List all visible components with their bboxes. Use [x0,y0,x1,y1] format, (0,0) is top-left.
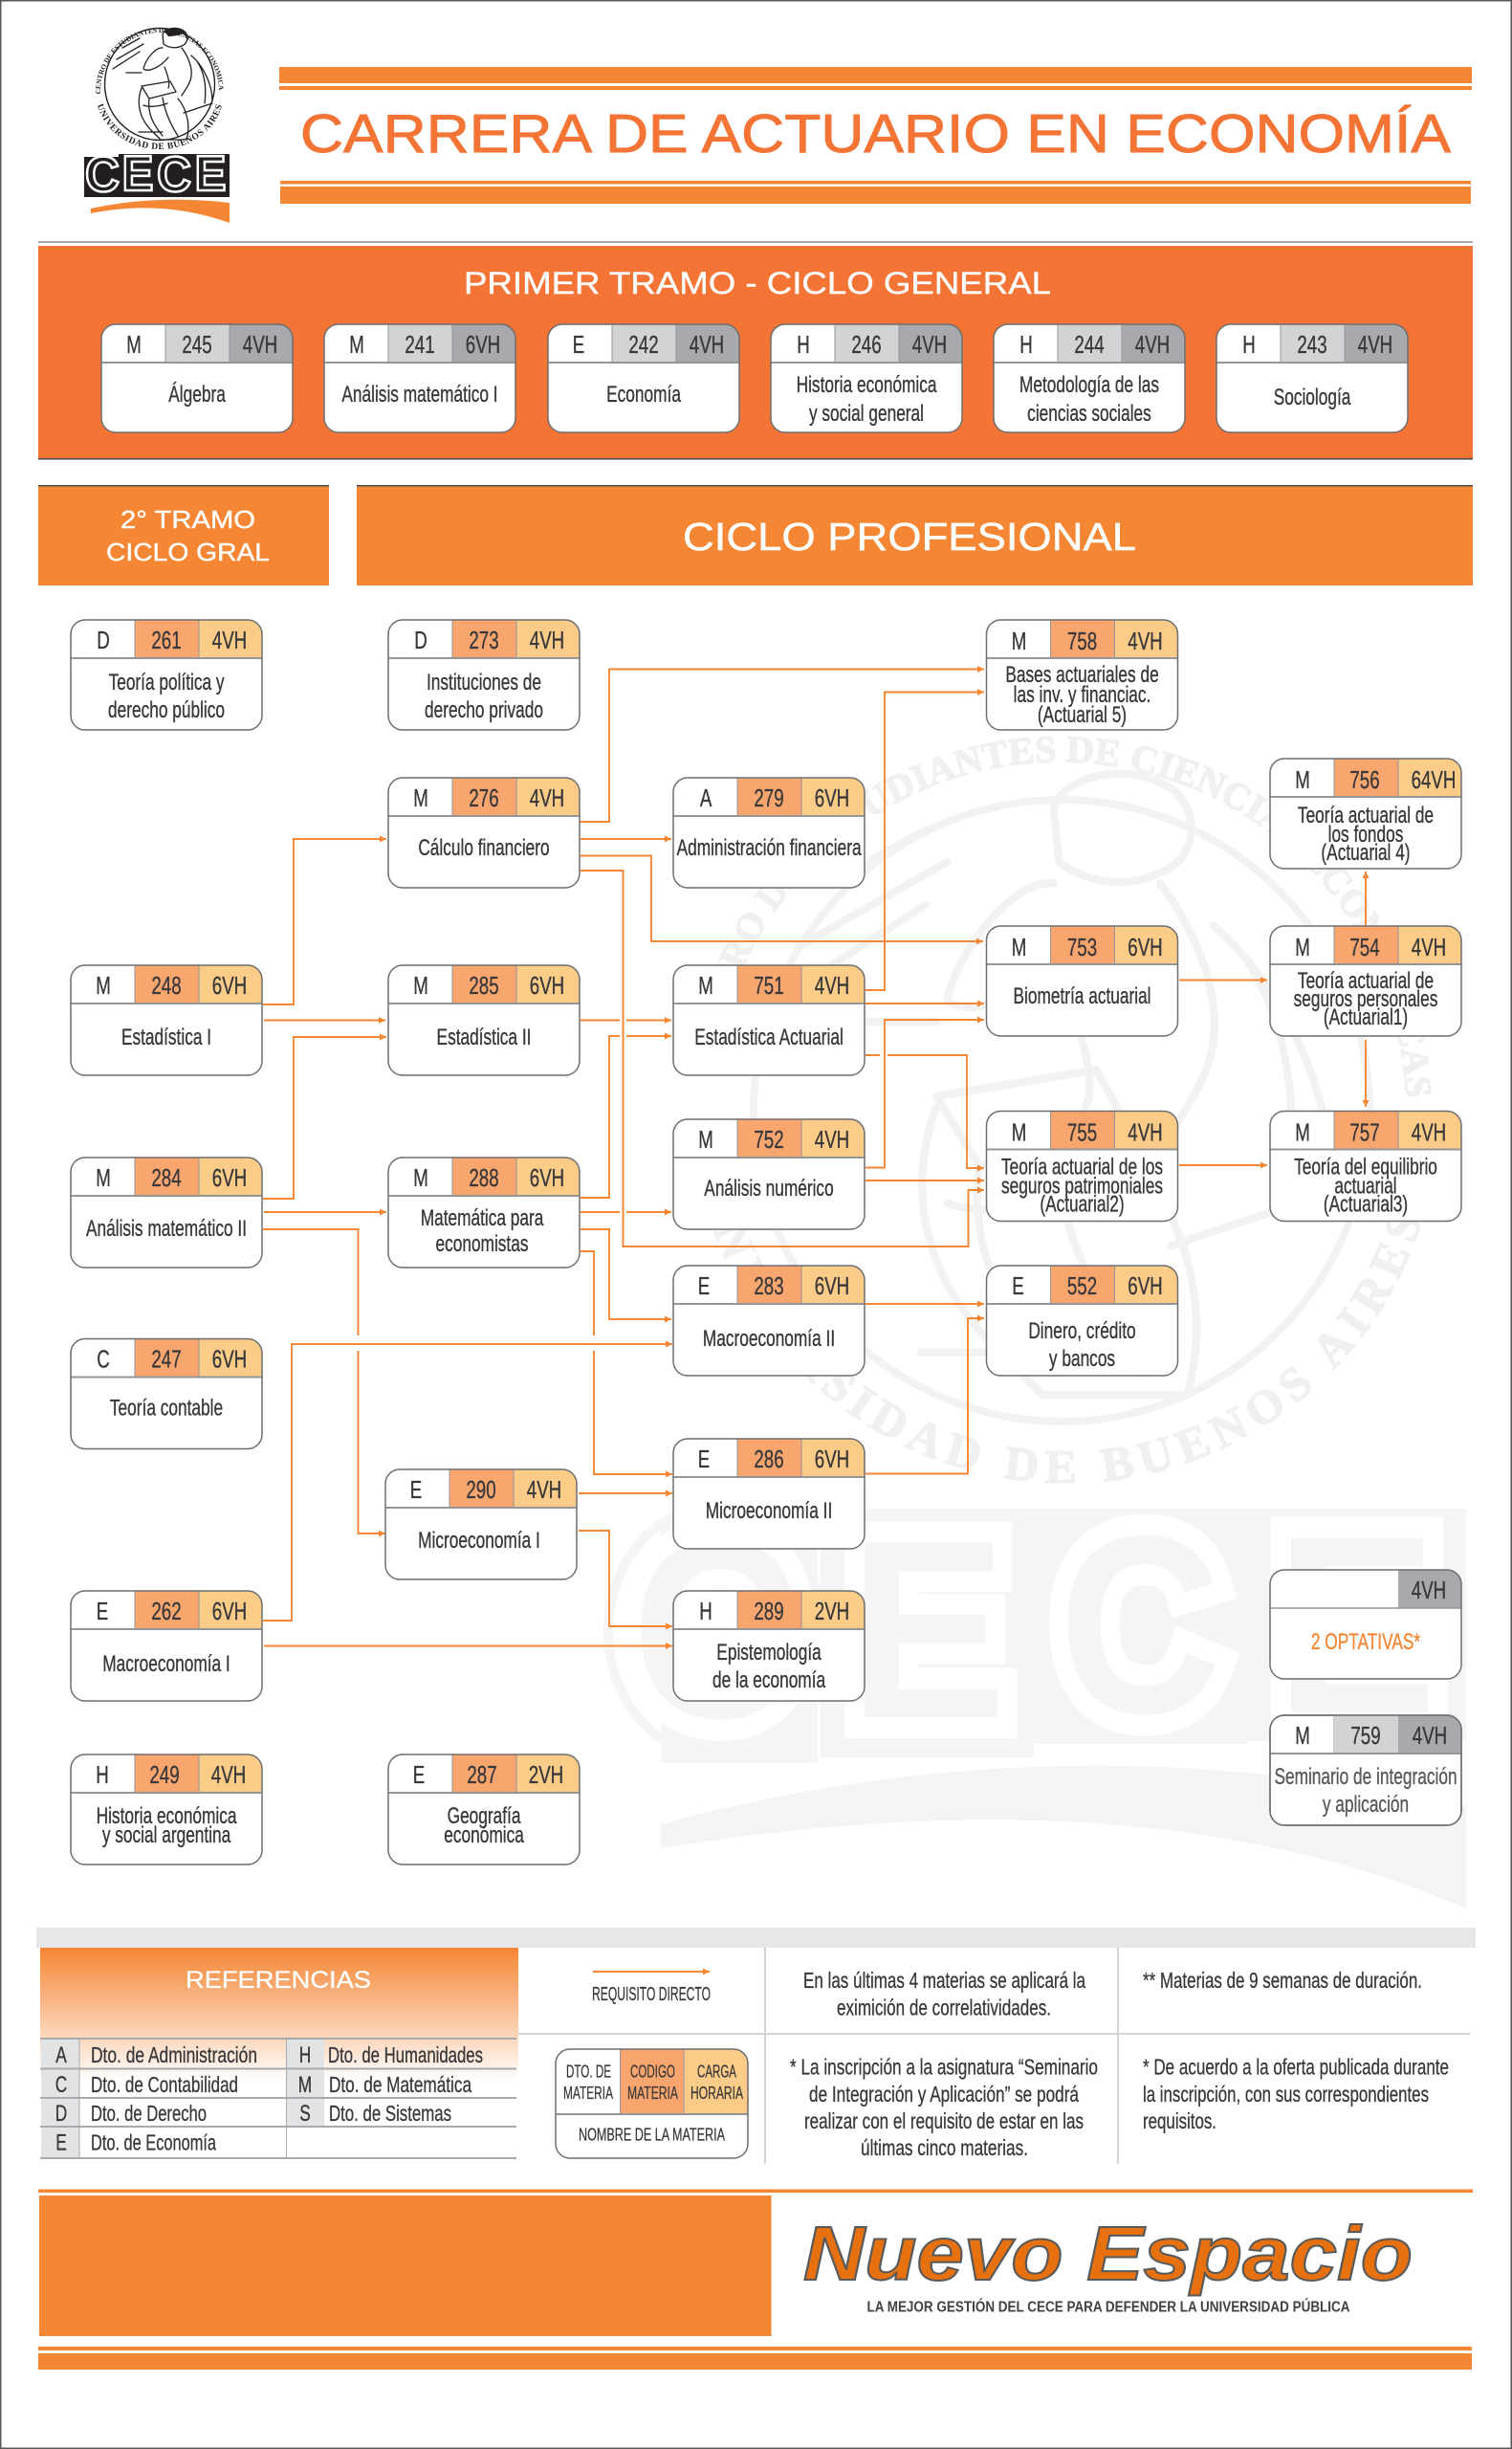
note: últimas 4 materias: eximición de correlatividades. [837,1996,1051,2020]
arrow: 755 to 757 [1179,1164,1267,1166]
card: 284: 284 [151,1163,182,1192]
card: 753: Biometría actuarial [1013,983,1151,1009]
card: 758: 4VH [1128,627,1163,655]
card: Álgebra: Álgebra [168,382,226,408]
card: Álgebra: 4VH [243,330,277,359]
legend: requisito directo arrow [592,1972,711,2005]
card: Álgebra [101,324,293,432]
panel: ciclo profesional heading: CICLO PROFESIONAL [683,515,1136,559]
legend: requisito directo arrow: REQUISITO DIRECTO [592,1984,711,2005]
card: 284 [71,1158,262,1268]
card: 284: Análisis matemático II [86,1216,247,1242]
card: 273: Instituciones de [427,670,541,695]
flowchart: subject cards [71,620,1461,1864]
card: 261 [71,620,262,730]
card: 287: E [413,1760,425,1789]
card: 279: 6VH [815,783,849,812]
card: Historia económica y social general: H [797,330,810,359]
panel: 2° tramo heading [38,485,329,585]
card: Historia económica y social general: 246 [851,330,882,359]
watermark: CECE letters and swoosh: C [631,1489,800,1772]
card: Análisis matemático I [324,324,515,432]
arrow: 286 to 552 [866,1318,984,1473]
card: 755: (Actuarial2) [1040,1192,1125,1217]
card: 279: Administración financiera [677,835,862,861]
card: 287: económica [444,1822,524,1848]
card: 279: 279 [754,783,784,812]
note: seminario [790,2055,1098,2160]
card: 753: 753 [1067,933,1097,961]
card: 756: M [1295,765,1310,794]
logo swoosh [91,200,230,223]
table: departamentos: S [299,2101,311,2127]
card: 279: A [700,783,712,812]
card: Sociología: 243 [1297,330,1327,359]
card: 289: 2VH [815,1597,849,1625]
card: 759: y aplicación [1323,1792,1409,1818]
arrow: 262 to 289 [264,1645,672,1647]
card: 286: 6VH [815,1445,849,1473]
card: 552: Dinero, crédito [1028,1318,1136,1344]
note: seminario: * La inscripción a la asignatura “Seminario [790,2055,1098,2080]
card: 758: 758 [1067,627,1097,655]
arrow: 248 to 285 [264,1020,385,1022]
card: 286: E [698,1445,710,1473]
card: 752: 4VH [815,1125,849,1154]
table: departamentos: Dto. de Matemática [329,2072,471,2097]
card: 753 [987,926,1178,1036]
card: 286: 286 [754,1445,784,1473]
card: 285 [388,965,580,1075]
card: 759: 4VH [1413,1721,1447,1750]
card: Análisis matemático I: Análisis matemático I [341,382,498,408]
card: 752: Análisis numérico [704,1176,834,1202]
card: 284: 6VH [212,1163,247,1192]
card: 247: Teoría contable [110,1396,223,1421]
arrow: 288 to 283 [581,1229,671,1319]
card: Economía: E [573,330,584,359]
arrow: 276 to 758 [580,670,984,822]
note: oferta publicada [1143,2055,1449,2133]
card: Álgebra: 245 [182,330,212,359]
card: 273: D [414,626,427,654]
card: Historia económica y social general [771,324,962,432]
card: Metodología de las ciencias sociales: 4VH [1135,330,1170,359]
card: 273: 4VH [530,626,564,654]
note: últimas 4 materias [803,1968,1085,2020]
card: 248: 6VH [212,971,247,1000]
card: 289: Epistemología [716,1640,822,1666]
card: 756: 64VH [1412,765,1456,794]
note: últimas 4 materias: En las últimas 4 materias se aplicará la [803,1968,1085,1993]
flowchart: prerequisite arrows [263,670,1366,1645]
card: 290 [385,1469,577,1579]
arrow: 753 to 754 [1179,980,1267,982]
card: 262: 6VH [212,1597,247,1625]
card: 290: 290 [466,1475,496,1504]
card: Historia económica y social general: 4VH [912,330,947,359]
card: Sociología: Sociología [1274,385,1351,410]
card: 756 [1270,759,1461,869]
card: 262: 262 [151,1597,182,1625]
card: 753: 6VH [1128,933,1163,961]
card: 751: M [698,971,713,1000]
card: 757: M [1295,1117,1310,1146]
card: 249: y social argentina [102,1822,231,1848]
note: seminario: últimas cinco materias. [861,2135,1028,2160]
card: 2 optativas: 4VH [1412,1576,1446,1604]
card: 262: Macroeconomía I [102,1651,230,1677]
table: departamentos: M [298,2072,312,2098]
card: 756: los fondos [1328,822,1403,848]
card: 751: 4VH [815,971,849,1000]
note: 9 semanas: ** Materias de 9 semanas de duración. [1143,1968,1422,1993]
card: 552 [987,1266,1178,1376]
arrow: 290 to 289 [579,1531,672,1626]
card: 283: E [698,1271,710,1300]
card: 286: Microeconomía II [706,1498,832,1524]
arrow: 288 to 752 [581,1211,671,1213]
legend: card key: DTO. DE [566,2061,611,2082]
medallion [96,27,224,149]
watermark: medallion: UNIVERSIDAD DE BUENOS AIRES [713,1223,1420,1483]
legend: card key: CODIGO [630,2061,675,2082]
logo wordmark: E [122,146,153,202]
arrow: 248 to 276 [263,839,386,1004]
card: Metodología de las ciencias sociales: ciencias sociales [1027,401,1151,427]
card: 248: 248 [151,971,182,1000]
card: 273: 273 [469,626,499,654]
card: Sociología [1216,324,1408,432]
arrow: 290 to 286 [579,1492,672,1494]
card: Metodología de las ciencias sociales [994,324,1185,432]
card: 752: 752 [754,1125,784,1154]
legend: card key: NOMBRE DE LA MATERIA [579,2124,725,2145]
card: 758: (Actuarial 5) [1038,702,1127,728]
card: Economía: 4VH [690,330,724,359]
table: departamentos [40,2039,516,2158]
card: 751 [673,965,865,1075]
card: 288: M [413,1163,428,1192]
card: 261: Teoría política y [109,670,225,695]
table: departamentos: Dto. de Administración [91,2042,257,2067]
tagline: LA MEJOR GESTIÓN DEL CECE PARA DEFENDER LA UNIVERSIDAD PÚBLICA [866,2298,1350,2315]
card: 289: H [699,1597,712,1625]
card: 2 optativas: 2 OPTATIVAS* [1311,1629,1420,1655]
card: 249 [71,1754,262,1864]
card: 276: M [413,783,428,812]
card: 262 [71,1591,262,1701]
card: 755: seguros patrimoniales [1001,1174,1163,1199]
card: 754: Teoría actuarial de [1298,968,1434,994]
watermark: CECE letters and swoosh: E [849,1489,1006,1772]
card: 249: Historia económica [97,1803,237,1829]
card: 755: M [1012,1117,1026,1146]
card: 287: Geografía [448,1803,521,1829]
card: 757 [1270,1112,1461,1221]
panel: ciclo profesional heading [357,485,1473,585]
card: 756: 756 [1349,765,1380,794]
watermark: CECE letters and swoosh: C [1059,1484,1221,1767]
card: 754 [1270,926,1461,1036]
arrow: 284 to 288 [264,1211,386,1213]
card: 262: E [97,1597,108,1625]
footer orange block [39,2195,771,2336]
card: 754: M [1295,933,1310,961]
card: 757: Teoría del equilibrio [1294,1155,1437,1180]
card: 283: 283 [754,1271,784,1300]
card: 248 [71,965,262,1075]
card: 276: Cálculo financiero [418,835,550,861]
arrow: 284 to 285 [263,1037,386,1199]
arrow: 276 to 279 [581,838,671,840]
arrow: 751 to 755 [866,1055,984,1168]
card: Metodología de las ciencias sociales: H [1019,330,1033,359]
card: 248: M [96,971,111,1000]
arrow: 754 to 756 [1365,871,1367,926]
card: 285: 6VH [530,971,564,1000]
card: Álgebra: M [126,330,142,359]
card: 2 optativas [1270,1570,1461,1679]
card: 287: 2VH [529,1760,563,1789]
card: 289: 289 [754,1597,784,1625]
table: departamentos: Dto. de Contabilidad [91,2072,238,2097]
arrow: 754 to 757 [1365,1040,1367,1107]
logo: Nuevo Espacio: Nuevo Espacio [803,2211,1413,2296]
card: 283 [673,1266,865,1376]
card: 753: M [1012,933,1026,961]
card: 287 [388,1754,580,1864]
heading: primer tramo: PRIMER TRAMO - CICLO GENERAL [464,266,1051,300]
card: 759: Seminario de integración [1274,1764,1457,1790]
footer [38,2189,1473,2370]
table: departamentos: Dto. de Humanidades [328,2042,483,2067]
arrow: 285 to 751 [581,1020,671,1022]
legend: card key: HORARIA [690,2083,743,2103]
card: 758 [987,620,1178,730]
card: Historia económica y social general: y social general [809,401,924,427]
card: 288: 6VH [530,1163,564,1192]
arrow: 262 to 283 [263,1344,672,1621]
title: CARRERA DE ACTUARIO EN ECONOMÍA [300,103,1451,165]
card: Economía: Economía [606,382,681,408]
card: 285: 285 [469,971,499,1000]
arrow: 284 to 290 [263,1229,385,1533]
panel: 2° tramo heading: 2° TRAMO [121,505,255,534]
card: 247 [71,1339,262,1448]
card: 751: Estadística Actuarial [694,1025,844,1050]
card: 759 [1270,1715,1461,1825]
card: 283: 6VH [815,1271,849,1300]
table: departamentos: E [55,2130,67,2155]
note: seminario: de Integración y Aplicación” se podrá [809,2082,1079,2107]
card: 285: Estadística II [437,1025,531,1050]
card: Historia económica y social general: Historia económica [797,372,937,398]
card: 757: (Actuarial3) [1324,1192,1408,1217]
heading: referencias: REFERENCIAS [186,1967,371,1994]
card: Metodología de las ciencias sociales: 244 [1074,330,1105,359]
card: 283: Macroeconomía II [703,1326,835,1352]
card: 755 [987,1112,1178,1221]
arrow: 751 to 753 [866,1003,984,1004]
card: Análisis matemático I: 241 [405,330,435,359]
card: 754: seguros personales [1294,986,1437,1012]
arrow: 288 to 286 [581,1251,672,1474]
card: 752 [673,1119,865,1229]
card: 755: 4VH [1128,1117,1163,1146]
table: departamentos: Dto. de Derecho [91,2101,207,2126]
card: 261: 261 [151,626,182,654]
note: seminario: realizar con el requisito de estar en las [804,2108,1084,2133]
heading: referencias [40,1948,518,2082]
arrow: 276 to 755 [581,871,984,1247]
card: 290: E [410,1475,422,1504]
card: 273: derecho privado [425,697,543,723]
card: 758: Bases actuariales de [1005,662,1159,688]
card: 261: 4VH [212,626,247,654]
card: 287: 287 [467,1760,497,1789]
logo wordmark: E [195,146,226,202]
card: 754: 4VH [1412,933,1446,961]
panel: primer tramo [38,246,1473,459]
card: 285: M [413,971,428,1000]
note: oferta publicada: requisitos. [1143,2108,1216,2133]
watermark: CECE letters and swoosh [608,1484,1466,1908]
card: 249: 4VH [211,1760,246,1789]
card: 289 [673,1591,865,1701]
arrow: 276 to 753 [581,855,983,941]
card: 288: 288 [469,1163,499,1192]
card: 755: 755 [1067,1117,1097,1146]
arrow: 752 to 755 [866,1180,984,1181]
arrow: 752 to 753 [866,1020,984,1167]
logo wordmark: C [85,147,120,203]
card: Sociología: H [1242,330,1256,359]
card: 758: las inv. y financiac. [1014,682,1150,708]
card: 276 [388,778,580,888]
card: 288: Matemática para [421,1205,544,1231]
card: 248: Estadística I [121,1025,211,1050]
table: departamentos: A [55,2042,67,2068]
card: Metodología de las ciencias sociales: Metodología de las [1019,372,1159,398]
card: 290: Microeconomía I [418,1528,540,1554]
card: Análisis matemático I: 6VH [466,330,500,359]
card: 249: 249 [149,1760,180,1789]
card: 757: 757 [1349,1117,1380,1146]
card: Análisis matemático I: M [349,330,364,359]
card: 286 [673,1439,865,1549]
card: Economía [548,324,739,432]
card: 247: 247 [151,1344,182,1373]
card: 288: economistas [436,1231,528,1257]
logo: CECE medallion [84,27,230,223]
card: 552: 6VH [1128,1271,1163,1300]
table: departamentos: H [299,2042,311,2068]
card: 288 [388,1158,580,1268]
card: 290: 4VH [527,1475,561,1504]
logo wordmark: C [157,147,191,203]
panel: referencias [36,1928,1476,2164]
card: 276: 276 [469,783,499,812]
legend: card key: CARGA [697,2061,736,2082]
card: 261: derecho público [108,697,225,723]
card: 261: D [97,626,110,654]
table: departamentos: Dto. de Economía [91,2129,216,2154]
card: Sociología: 4VH [1358,330,1392,359]
card: 755: Teoría actuarial de los [1001,1155,1163,1180]
card: 279 [673,778,865,888]
card: 759: 759 [1350,1721,1381,1750]
table: departamentos: D [55,2101,67,2127]
card: 754: (Actuarial1) [1324,1004,1408,1030]
card: 754: 754 [1349,933,1380,961]
card: 756: Teoría actuarial de [1298,803,1434,828]
table: departamentos: C [55,2072,67,2098]
panel: 2° tramo heading: CICLO GRAL [106,538,270,566]
card: 249: H [96,1760,109,1789]
card: 552: 552 [1067,1271,1097,1300]
arrow: 283 to 552 [866,1303,984,1305]
card: 756: (Actuarial 4) [1321,840,1411,866]
watermark: CECE letters and swoosh: E [1275,1484,1437,1767]
arrow: 288 to 751 [581,1036,671,1198]
card: 247: 6VH [212,1344,247,1373]
watermark: medallion: CENTRO DE ESTUDIANTES DE CIENCIAS ECONOMICAS [716,737,1431,1096]
card: 552: E [1012,1271,1024,1300]
legend: card key: MATERIA [563,2083,613,2103]
card: 273 [388,620,580,730]
table: departamentos: Dto. de Sistemas [329,2101,451,2126]
card: 751: 751 [754,971,784,1000]
logo wordmark [84,146,230,203]
card: 276: 4VH [530,783,564,812]
card: 247: C [97,1344,110,1373]
title block [279,67,1472,204]
card: 757: 4VH [1412,1117,1446,1146]
card: Economía: 242 [628,330,659,359]
card: 757: actuarial [1334,1174,1397,1199]
card: 759: M [1295,1721,1310,1750]
card: 752: M [698,1125,713,1154]
watermark: medallion [713,737,1431,1483]
legend: card key [556,2049,748,2158]
card: 758: M [1012,627,1026,655]
medallion: UNIVERSIDAD DE BUENOS AIRES [98,103,222,149]
arrow: 751 to 758 [866,693,984,990]
card: 284: M [96,1163,111,1192]
legend: card key: MATERIA [627,2083,678,2103]
card: 552: y bancos [1049,1346,1115,1372]
card: 289: de la economía [712,1667,825,1693]
